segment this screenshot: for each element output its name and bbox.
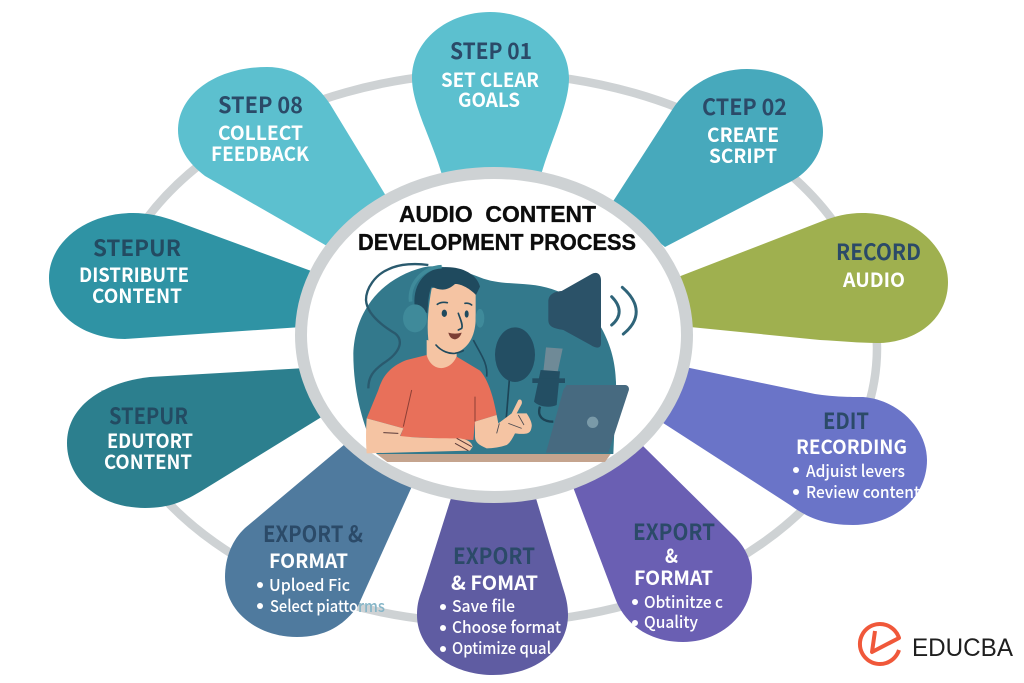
petal shape <box>225 444 413 637</box>
bullet list: Uploed Fic <box>269 572 350 596</box>
panel: step 02 create script <box>612 69 823 247</box>
shirt fold lines <box>403 390 475 427</box>
panel: export and format left <box>225 444 413 637</box>
bullet list: Save file <box>452 593 515 617</box>
facial features <box>436 302 472 353</box>
step heading: EXPORT <box>633 515 715 547</box>
petal shape <box>412 12 569 175</box>
forearm <box>366 418 473 453</box>
arm crease and finger lines <box>383 433 472 451</box>
bullet list <box>440 593 561 659</box>
panel: export and format right <box>573 445 752 642</box>
step title: FORMAT <box>269 545 348 574</box>
step title line 2: GOALS <box>458 84 520 113</box>
sound waves <box>612 287 636 334</box>
step title: SET CLEAR <box>441 64 539 93</box>
bullet list <box>257 572 385 617</box>
petal shape <box>678 213 948 343</box>
orange shirt <box>367 355 497 440</box>
hand detail lines <box>497 415 524 433</box>
microphone <box>532 347 565 422</box>
bullet list: Optimize qual <box>452 635 551 659</box>
step heading: EXPORT <box>453 539 535 571</box>
step heading: STEP 08 <box>218 88 303 120</box>
outer connecting ring <box>101 73 877 623</box>
step heading: STEPUR <box>93 231 181 263</box>
step heading: STEPUR <box>109 399 188 431</box>
panel: edit recording <box>660 367 927 525</box>
neck <box>427 340 457 370</box>
audio cable <box>366 264 428 388</box>
step title: COLLECT <box>218 117 303 146</box>
petal shape <box>67 368 328 508</box>
panel: step 08 collect feedback <box>178 67 386 246</box>
desk <box>377 454 611 462</box>
step title: CREATE <box>707 119 779 148</box>
petal shape <box>573 445 752 642</box>
ampersand: & <box>665 540 679 569</box>
step heading: EDIT <box>823 404 869 436</box>
bullet list: Adjuist levers <box>806 458 905 482</box>
step title line 2: SCRIPT <box>709 140 777 169</box>
step title: FORMAT <box>634 562 713 591</box>
teal backdrop blob <box>353 266 616 454</box>
petal shape <box>49 213 314 339</box>
panel: step 01 set clear goals <box>412 12 569 175</box>
petal shape <box>178 67 386 246</box>
panel: edit content <box>67 368 328 508</box>
step title: & FOMAT <box>451 567 538 596</box>
illustration: podcaster at microphone <box>353 264 636 462</box>
speaker icon <box>548 273 601 348</box>
panel: record audio <box>678 213 948 343</box>
step title: RECORDING <box>796 431 907 460</box>
title: DEVELOPMENT PROCESS <box>358 229 636 255</box>
step title: AUDIO <box>842 264 905 293</box>
step heading: STEP 01 <box>450 34 532 66</box>
panel: distribute content <box>49 213 314 339</box>
step title line 2: FEEDBACK <box>211 138 310 167</box>
laptop <box>546 385 629 453</box>
logo icon <box>860 624 899 664</box>
logo: EDUCBA <box>860 624 1013 664</box>
panel: export and format center <box>417 495 568 675</box>
logo wordmark: EDUCBA <box>912 634 1013 662</box>
title <box>358 201 636 255</box>
bullet list: Choose format <box>452 614 561 638</box>
hand <box>475 399 532 448</box>
step heading: EXPORT & <box>263 517 363 549</box>
bullet list: Obtinitze c <box>644 589 723 613</box>
face <box>428 282 476 353</box>
step title line 2: CONTENT <box>92 280 182 309</box>
step heading: RECORD <box>836 235 921 267</box>
center hub circle <box>301 173 687 497</box>
bullet list: Quality <box>644 609 698 633</box>
bullet list: Review content <box>806 479 920 503</box>
cable right <box>473 340 487 377</box>
title: AUDIO CONTENT <box>399 201 596 227</box>
step title: DISTRIBUTE <box>79 259 189 288</box>
headphones <box>403 267 484 332</box>
bullet list: Select piatto <box>270 593 358 617</box>
petal shape <box>417 495 568 675</box>
petal shape <box>612 69 823 247</box>
bullet list: rms <box>358 593 385 617</box>
bullet list <box>632 589 723 633</box>
hair <box>414 267 480 313</box>
step title line 2: CONTENT <box>104 446 192 475</box>
step heading: CTEP 02 <box>702 90 787 122</box>
bullet list <box>793 458 920 503</box>
step title: EDUTORT <box>107 425 193 454</box>
pop filter <box>495 327 535 422</box>
petal shape <box>660 367 927 525</box>
